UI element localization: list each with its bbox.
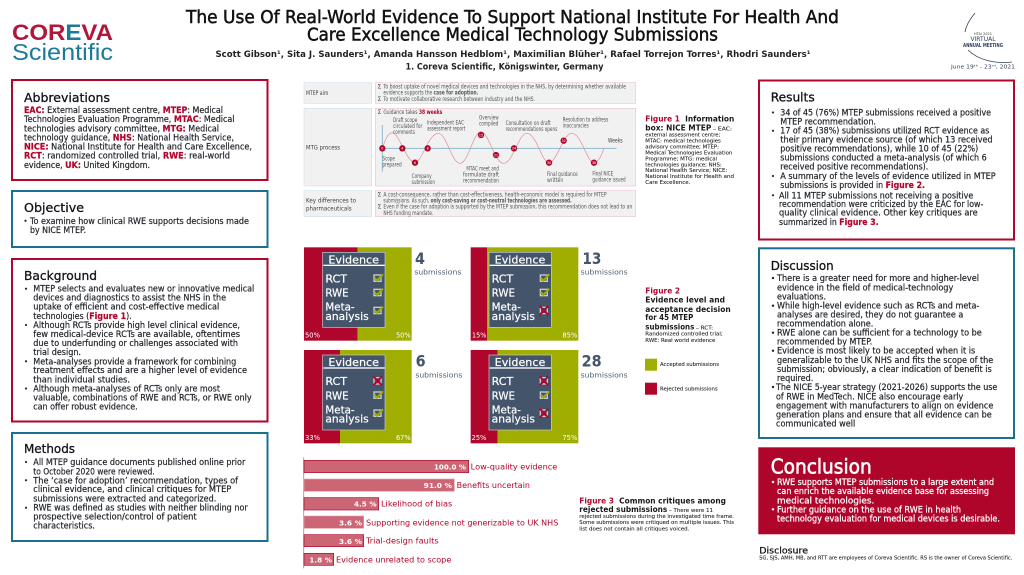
title	[185, 8, 839, 46]
bar: evidence unrelated to scope: Evidence unrelated to scope	[336, 555, 452, 564]
row: key differences to pharmaceuticals: submissions. As such, only cost-saving or cost-neutral technologies are assessed.	[383, 197, 572, 205]
labels: timeline steps: Final guidance	[547, 170, 578, 178]
bar: benefits uncertain: 91.0 %	[424, 481, 453, 490]
text: discussion bullets	[772, 273, 997, 428]
labels: timeline steps: comments	[393, 128, 415, 136]
caption: figure 1: MTAC: medical technologies	[645, 139, 721, 145]
chart: RWE meta-analysis	[304, 350, 463, 443]
chart: RWE only: RCT	[492, 375, 514, 388]
labels: timeline steps: Scope	[382, 154, 395, 162]
caption: figure 3: – There were 11	[669, 508, 713, 514]
text: abbreviation list: EAC: External assessment centre, MTEP: Medical	[24, 105, 223, 115]
row: key differences to pharmaceuticals: Even if the case for adoption is supported by the MTEP submission, this recommendation does not lead to an	[383, 203, 632, 211]
heading: methods: Methods	[24, 441, 75, 456]
caption: figure 3: list does not contain all critiques voiced.	[579, 526, 690, 532]
caption: figure 2: Randomized controlled trial;	[645, 331, 723, 337]
chart: RCT RWE only: RWE	[492, 287, 515, 300]
bar: trial-design faults: 3.6 %	[339, 537, 363, 546]
text: methods bullets: RWE was defined as studies with neither blinding nor	[33, 503, 248, 513]
text: results bullets: submissions conducted a meta-analysis (of which 6	[780, 152, 987, 162]
text: methods bullets: All MTEP guidance documents published online prior	[33, 457, 246, 467]
row: MTEP aim: To boost uptake of novel medical devices and technologies in the NHS, by determining whether available	[383, 83, 626, 91]
text: results bullets: summarized in Figure 3.	[779, 217, 879, 227]
text: background bullets: Meta-analyses provide a framework for combining	[33, 356, 236, 366]
chart: RCT RWE meta-analysis: Meta-	[325, 301, 355, 314]
text: methods bullets: prospective selection/control of patient	[33, 512, 197, 522]
row: key differences to pharmaceuticals: Σ	[377, 203, 381, 211]
text: discussion bullets: recommended by MTEP.	[777, 337, 872, 347]
text: conclusion bullets: Further guidance on the use of RWE in health	[777, 505, 961, 515]
labels: timeline steps: Independent EAC	[427, 118, 464, 126]
disclosure: Disclosure	[759, 546, 808, 556]
bar: evidence unrelated to scope	[304, 553, 452, 565]
row: MTEP aim: MTEP aim	[306, 89, 328, 97]
text: objective	[24, 216, 249, 235]
row: key differences to pharmaceuticals: A cost-consequence, rather than cost-effectiveness, health-economic model is required for MTEP	[383, 190, 607, 198]
bar: likelihood of bias: Likelihood of bias	[381, 500, 452, 509]
chart: timeline wave: 30	[547, 161, 551, 165]
labels: timeline steps: Draft scope	[393, 116, 417, 124]
text: conclusion bullets: RWE supports MTEP submissions to a large extent and	[777, 478, 994, 488]
caption: figure 1	[645, 113, 734, 186]
labels: timeline steps: Consultation on draft	[506, 119, 551, 127]
caption: figure 3: Figure 3 Common critiques among	[579, 495, 726, 505]
panel: results	[759, 80, 1014, 240]
logo: Coreva Scientific: Scientific	[12, 39, 113, 65]
chart: RWE meta-analysis: 6	[416, 352, 426, 371]
row: MTEP aim: To motivate collaborative research between industry and the NHS.	[383, 95, 535, 103]
logo: HTAi virtual annual meeting: ANNUAL MEETING	[963, 43, 1003, 49]
caption: figure 3: Some submissions were critiqued on multiple issues. This	[579, 520, 734, 526]
chart: timeline wave: 0	[381, 147, 383, 151]
heading: conclusion: Conclusion	[771, 454, 872, 478]
text: background bullets: devices and diagnostics to assist the NHS in the	[33, 293, 226, 303]
text: background bullets: technologies (Figure 1).	[33, 311, 132, 321]
chart: RCT RWE meta-analysis	[304, 247, 462, 341]
caption: figure 2: submissions	[645, 321, 694, 331]
row: MTG process	[304, 108, 636, 186]
caption: figure 2: acceptance decision	[645, 304, 731, 314]
text: discussion bullets: There is a greater need for more and higher-level	[776, 273, 979, 283]
caption: figure 1: Medical Technologies Evaluation	[645, 150, 732, 156]
bar: likelihood of bias	[304, 498, 452, 510]
text: abbreviation list: technologies advisory committee, MTG: Medical	[24, 124, 219, 134]
row: MTG process: MTG process	[306, 144, 341, 152]
chart: RWE only: Evidence	[495, 356, 546, 369]
labels: timeline steps: circulated for	[393, 122, 423, 130]
heading: abbreviations: Abbreviations	[24, 90, 110, 105]
row: key differences to pharmaceuticals	[304, 190, 636, 217]
chart: RWE only: RWE	[492, 389, 515, 402]
chart: RWE only: analysis	[492, 413, 535, 426]
text: discussion bullets: generation plans and ensure that all evidence can be	[776, 409, 992, 419]
text: abbreviation list: NICE: National Institute for Health and Care Excellence,	[24, 142, 252, 152]
text: results bullets: MTEP recommendation.	[780, 116, 876, 126]
bar: low-quality evidence: Low-quality evidence	[471, 463, 558, 472]
bar: evidence unrelated to scope: 1.8 %	[309, 555, 333, 564]
caption: figure 1: Programme; MTG: medical	[645, 156, 717, 162]
caption: figure 1: Care Excellence.	[645, 180, 691, 186]
panel: discussion	[759, 248, 1014, 438]
text: background bullets: Although RCTs provide high level clinical evidence,	[33, 320, 240, 330]
chart: RCT RWE only: 13	[582, 249, 601, 268]
text: background bullets: few medical-device RCTs are available, oftentimes	[33, 329, 240, 339]
panel: abbreviations	[12, 80, 268, 180]
caption: figure 2: Figure 2	[645, 285, 680, 295]
authors and affiliation: 1. Coreva Scientific, Königswinter, Germany	[406, 62, 604, 72]
caption: figure 2: – RCT:	[696, 325, 713, 331]
labels: timeline steps: recommendation	[463, 176, 499, 184]
chart: RWE meta-analysis: 33%	[305, 434, 320, 442]
chart: timeline wave: 21	[494, 153, 498, 157]
text: conclusion bullets: can enrich the available evidence base for assessing	[777, 487, 989, 497]
chart: RWE only: 25%	[472, 434, 486, 442]
text: objective: To examine how clinical RWE supports decisions made	[29, 216, 249, 226]
figure 1: NICE MTEP information box	[304, 83, 636, 217]
row: key differences to pharmaceuticals: pharmaceuticals	[306, 204, 352, 212]
chart: timeline wave: 38	[592, 161, 596, 165]
text: background bullets: can offer robust evidence.	[33, 402, 138, 412]
text: conclusion bullets	[772, 478, 1000, 524]
text: discussion bullets: While high-level evidence such as RCTs and meta-	[777, 301, 979, 311]
labels: timeline steps: submission	[412, 178, 435, 186]
chart: RCT RWE meta-analysis: analysis	[325, 310, 369, 323]
authors and affiliation	[216, 50, 811, 72]
bar: low-quality evidence: 100.0 %	[434, 463, 467, 472]
row: MTG process: Σ	[377, 108, 381, 116]
text: conclusion bullets: medical technologies.	[777, 496, 874, 506]
text: background bullets: MTEP selects and evaluates new or innovative medical	[33, 284, 254, 294]
chart: timeline wave: 24	[512, 147, 516, 151]
heading: discussion: Discussion	[771, 258, 834, 273]
text: discussion bullets: communicated well	[776, 418, 855, 428]
text: methods bullets	[25, 457, 248, 531]
title: Care Excellence Medical Technology Submissions	[307, 26, 718, 46]
text: abbreviation list	[23, 105, 252, 170]
chart: timeline wave: 15	[479, 133, 483, 137]
row: key differences to pharmaceuticals: Key differences to	[306, 196, 356, 204]
caption: figure 1: box: NICE MTEP	[645, 123, 711, 133]
row: MTEP aim: evidence supports the case for adoption.	[383, 89, 478, 97]
chart: RWE only: submissions	[581, 370, 628, 379]
text: discussion bullets: generalizable to the UK NHS and fits the scope of the	[777, 355, 993, 365]
chart: RWE meta-analysis: 67%	[396, 434, 411, 442]
chart: RCT RWE meta-analysis: Evidence	[328, 253, 379, 266]
text: results bullets: quality clinical evidence. Other key critiques are	[779, 208, 978, 218]
chart: timeline wave: 8	[427, 147, 429, 151]
row: MTEP aim: Σ	[377, 95, 381, 103]
authors and affiliation: Scott Gibson¹, Sita J. Saunders¹, Amanda Hansson Hedblom¹, Maximilian Blüher¹, Rafael Torrejon Torres¹, Rhodri Saunders¹	[216, 50, 811, 60]
chart: RCT RWE meta-analysis: RWE	[325, 287, 349, 300]
bar: evidence not generalizable	[304, 516, 558, 528]
chart: RCT RWE only: analysis	[492, 310, 535, 323]
heading: results: Results	[771, 90, 815, 105]
text: discussion bullets: required.	[777, 373, 813, 383]
caption: figure 3: rejected submissions	[579, 504, 667, 514]
chart: RCT RWE only: 85%	[562, 331, 577, 339]
text: background bullets: trial design.	[33, 347, 81, 357]
chart: timeline wave: 6	[414, 161, 416, 165]
text: discussion bullets: submission; obviously, a clear indication of benefit is	[777, 364, 992, 374]
chart: RWE meta-analysis: Meta-	[325, 403, 355, 416]
bar: likelihood of bias: 4.5 %	[354, 500, 377, 509]
chart: RCT RWE meta-analysis: 50%	[305, 331, 320, 339]
panel: background	[12, 259, 268, 422]
labels: timeline steps: Overview	[479, 113, 499, 121]
chart: RWE meta-analysis: submissions	[415, 370, 463, 379]
text: results bullets: 34 of 45 (76%) MTEP submissions received a positive	[780, 107, 991, 117]
labels: timeline steps: inaccuracies	[563, 122, 589, 130]
logo: Coreva Scientific	[12, 20, 113, 65]
text: conclusion bullets: technology evaluation for medical devices is desirable.	[777, 514, 1000, 524]
labels: timeline steps: prepared	[382, 160, 402, 168]
text: methods bullets: The ‘case for adoption’ recommendation, types of	[32, 475, 239, 485]
text: discussion bullets: engagement with manufacturers to align on evidence	[776, 400, 993, 410]
heading: objective: Objective	[24, 200, 84, 215]
text: background bullets: Although meta-analyses of RCTs only are most	[33, 383, 221, 393]
bar: benefits uncertain	[304, 479, 530, 491]
caption: figure 1: National Health Service; NICE:	[645, 168, 728, 174]
labels: timeline steps: written	[547, 176, 563, 184]
text: results bullets: positive recommendations), while 10 of 45 (22%)	[780, 143, 978, 153]
chart: RWE only: 75%	[562, 434, 577, 442]
labels: timeline steps: guidance issued	[592, 176, 626, 184]
chart: timeline wave: 32	[562, 139, 566, 143]
text: results bullets: their primary evidence source (of which 13 received	[780, 135, 993, 145]
caption: figure 2	[645, 285, 731, 344]
logo: Coreva Scientific: COREVA	[12, 20, 113, 45]
disclosure	[759, 546, 1013, 562]
text: discussion bullets: The NICE 5-year strategy (2021-2026) supports the use	[775, 382, 997, 392]
text: methods bullets: submissions were extracted and categorized.	[33, 494, 216, 504]
caption: figure 2: Evidence level and	[645, 295, 725, 305]
text: discussion bullets: Evidence is most likely to be accepted when it is	[777, 346, 975, 356]
text: discussion bullets: evaluations.	[777, 292, 826, 302]
text: discussion bullets: of RWE in MedTech. NICE also encourage early	[776, 391, 963, 401]
row: MTEP aim	[304, 83, 636, 103]
caption: figure 1: external assessment centre;	[645, 133, 721, 139]
text: discussion bullets: evidence in the field of medical-technology	[777, 282, 953, 292]
figure 3: bar chart of critiques	[304, 457, 558, 568]
chart: RCT RWE only: Evidence	[495, 253, 546, 266]
labels: timeline steps: compiled	[479, 119, 498, 127]
text: objective: by NICE MTEP.	[30, 225, 86, 235]
caption: figure 1: technologies guidance; NHS:	[645, 162, 722, 168]
text: methods bullets: characteristics.	[33, 521, 95, 531]
caption: figure 1: National Institute for Health and	[645, 174, 734, 180]
caption: figure 3	[579, 495, 734, 532]
chart: timeline wave	[379, 125, 617, 172]
chart: RCT RWE only: RCT	[492, 272, 514, 285]
labels: timeline steps: Final NICE	[592, 170, 613, 178]
labels: timeline steps: recommendations opens	[506, 125, 558, 133]
row: key differences to pharmaceuticals: NHS funding mandate.	[383, 209, 433, 217]
chart: RCT RWE meta-analysis: 50%	[396, 331, 411, 339]
text: abbreviation list: technology guidance, NHS: National Health Service,	[24, 132, 234, 142]
chart: RWE meta-analysis: Evidence	[328, 356, 379, 369]
caption: figure 3: rejected submissions during the investigated time frame.	[579, 514, 734, 520]
text: results bullets: A summary of the levels of evidence utilized in MTEP	[780, 171, 996, 181]
text: results bullets: 17 of 45 (38%) submissions utilized RCT evidence as	[780, 126, 989, 136]
figure 2: evidence level charts	[304, 247, 628, 443]
text: discussion bullets: analyses are desired, they do not guarantee a	[777, 310, 963, 320]
chart: RWE meta-analysis: RWE	[325, 389, 349, 402]
legend: figure 2: Rejected submissions	[660, 386, 718, 392]
labels: timeline steps: Resolution to address	[563, 116, 609, 124]
bar: evidence not generalizable: Supporting evidence not generizable to UK NHS	[366, 518, 558, 527]
logo: HTAi virtual annual meeting: June 19ᵗʰ - 23ʳᵈ, 2021	[950, 64, 1015, 70]
text: results bullets	[772, 107, 996, 227]
bar: trial-design faults: Trial-design faults	[365, 537, 439, 546]
text: discussion bullets: recommendation alone.	[777, 319, 873, 329]
row: MTEP aim: Σ	[377, 83, 381, 91]
chart: RCT RWE only: submissions	[581, 268, 628, 277]
labels: timeline steps: Weeks	[608, 137, 623, 145]
row: key differences to pharmaceuticals: Σ	[377, 190, 381, 198]
chart: RCT RWE meta-analysis: 4	[415, 249, 425, 268]
logo: HTAi virtual annual meeting	[950, 13, 1015, 70]
text: background bullets: treatment effects and are a higher level of evidence	[33, 365, 247, 375]
text: results bullets: received positive recommendations).	[780, 162, 928, 172]
text: results bullets: All 11 MTEP submissions not receiving a positive	[779, 190, 973, 200]
text: background bullets	[25, 284, 254, 412]
labels: timeline steps: Company	[412, 172, 432, 180]
caption: figure 1: Figure 1 Information	[645, 113, 734, 123]
legend: figure 2	[645, 359, 719, 395]
text: abbreviation list: evidence, UK: United Kingdom.	[24, 160, 150, 170]
chart: RCT RWE only	[471, 247, 628, 341]
labels: timeline steps	[382, 113, 626, 186]
row: MTG process: Guidance takes 38 weeks	[383, 108, 442, 116]
chart: RCT RWE meta-analysis: RCT	[325, 272, 347, 285]
chart: RCT RWE only: Meta-	[492, 301, 521, 314]
legend: figure 2: Accepted submissions	[660, 362, 719, 368]
panel: conclusion	[758, 447, 1015, 534]
caption: figure 1: advisory committee; MTEP:	[645, 144, 719, 150]
bar: trial-design faults	[304, 535, 439, 547]
text: methods bullets: clinical evidence, and clinical critiques for MTEP	[33, 484, 231, 494]
caption: figure 2: RWE: Real world evidence	[645, 338, 715, 344]
text: discussion bullets: RWE alone can be sufficient for a technology to be	[777, 328, 982, 338]
panel: objective	[12, 191, 268, 247]
text: results bullets: submissions is provided in Figure 2.	[780, 180, 925, 190]
chart: RWE meta-analysis: analysis	[325, 413, 369, 426]
chart: RWE only: Meta-	[492, 403, 521, 416]
title: The Use Of Real-World Evidence To Support National Institute For Health And	[185, 8, 839, 28]
caption: figure 2: for 45 MTEP	[645, 312, 693, 322]
text: background bullets: uptake of efficient and cost-effective medical	[33, 302, 219, 312]
bar: benefits uncertain: Benefits uncertain	[457, 481, 530, 490]
text: abbreviation list: RCT: randomized controlled trial, RWE: real-world	[24, 150, 230, 160]
labels: timeline steps: MTAC meet and	[466, 164, 499, 172]
text: background bullets: than individual studies.	[33, 374, 130, 384]
text: abbreviation list: Technologies Evaluation Programme, MTAC: Medical	[23, 114, 235, 124]
disclosure: SG, SJS, AMH, MB, and RTT are employees of Coreva Scientific. RS is the owner of Coreva Scientific.	[759, 556, 1013, 562]
caption: figure 1: – EAC:	[713, 127, 732, 133]
text: background bullets: due to underfunding or challenges associated with	[33, 338, 238, 348]
labels: timeline steps: assessment report	[427, 124, 466, 132]
text: methods bullets: to October 2020 were reviewed.	[33, 466, 155, 476]
heading: background: Background	[24, 268, 97, 283]
text: background bullets: valuable, combinations of RWE and RCTs, or RWE only	[33, 392, 252, 402]
bar: low-quality evidence	[304, 460, 558, 473]
chart: RWE only	[471, 350, 628, 443]
logo: HTAi virtual annual meeting: VIRTUAL	[970, 36, 996, 43]
chart: RCT RWE only: 15%	[472, 331, 486, 339]
logo: HTAi virtual annual meeting: HTAi 2021	[974, 32, 992, 36]
chart: RWE only: 28	[582, 352, 602, 371]
chart: timeline wave: 4	[401, 147, 403, 151]
chart: RWE meta-analysis: RCT	[325, 375, 347, 388]
panel: methods	[12, 433, 268, 541]
bar: evidence not generalizable: 3.6 %	[339, 518, 363, 527]
text: results bullets: recommendation were criticized by the EAC for low-	[779, 199, 983, 209]
labels: timeline steps: formulate draft	[463, 170, 499, 178]
chart: RCT RWE meta-analysis: submissions	[414, 268, 462, 277]
